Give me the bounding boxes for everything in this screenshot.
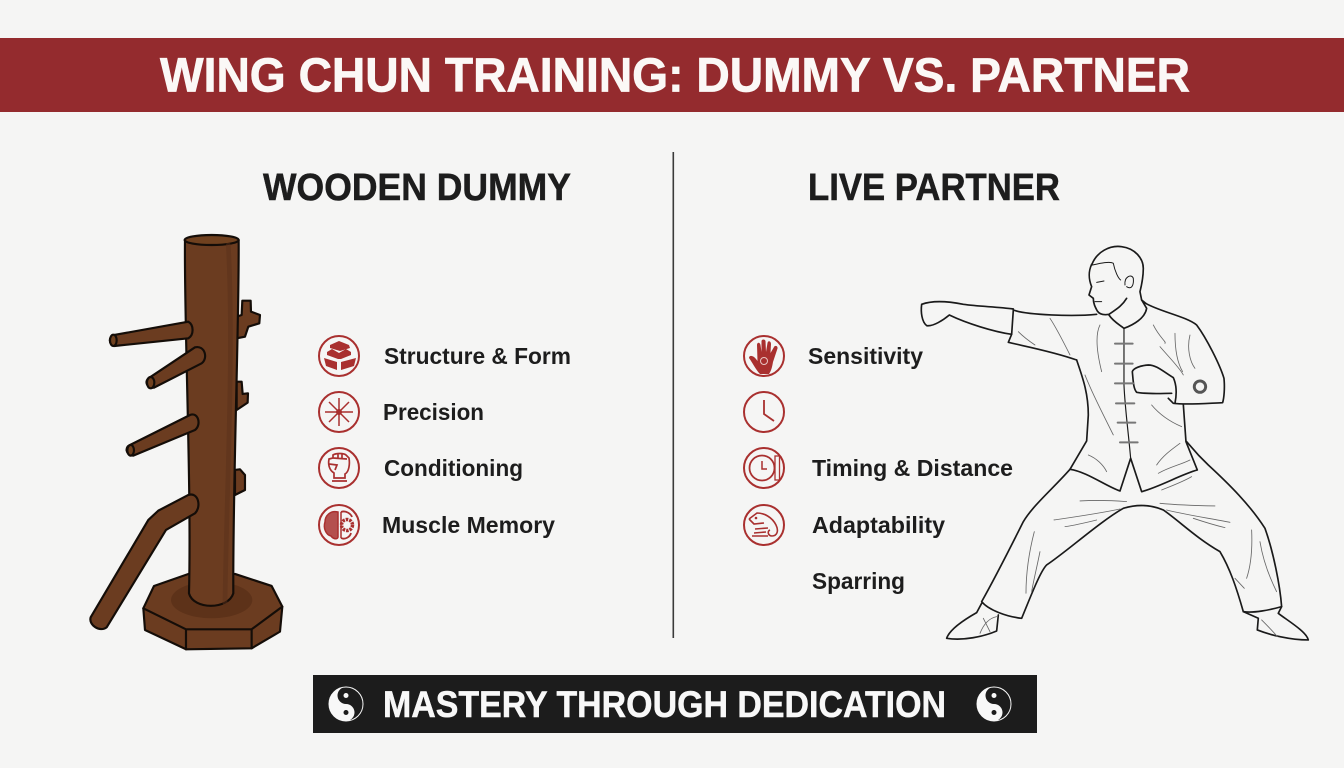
icon: clock: [744, 392, 784, 432]
icon: structure blocks: [319, 336, 359, 376]
heading: live partner: LIVE PARTNER: [808, 167, 1060, 209]
label: sensitivity: Sensitivity: [808, 343, 923, 369]
title banner: [0, 38, 1344, 112]
icon: precision burst: [319, 392, 359, 432]
label: adaptability: Adaptability: [812, 512, 945, 538]
icon: chameleon: [744, 505, 784, 545]
label: structure and form: Structure & Form: [384, 343, 571, 369]
icon: fist: [319, 448, 359, 488]
heading: wooden dummy: WOODEN DUMMY: [263, 167, 571, 209]
title: WING CHUN TRAINING: DUMMY VS. PARTNER: [160, 50, 1190, 102]
icon: hand: [744, 336, 784, 376]
icon: yin yang left: [329, 687, 363, 721]
label: conditioning: Conditioning: [384, 455, 523, 481]
list: live partner benefits: [744, 336, 1013, 594]
tattoo: [1194, 381, 1206, 392]
icon: yin yang right: [977, 687, 1011, 721]
footer text: MASTERY THROUGH DEDICATION: [383, 684, 946, 725]
label: precision: Precision: [383, 399, 484, 425]
label: timing and distance: Timing & Distance: [812, 455, 1013, 481]
icon: brain and gear: [319, 505, 359, 545]
footer banner: [313, 675, 1037, 733]
label: sparring: Sparring: [812, 568, 905, 594]
list: wooden dummy benefits: [319, 336, 571, 545]
icon: clock and ruler: [744, 448, 784, 488]
illustration: martial artist in punching stance: [921, 246, 1308, 640]
label: muscle memory: Muscle Memory: [382, 512, 555, 538]
illustration: wooden dummy: [90, 235, 282, 649]
